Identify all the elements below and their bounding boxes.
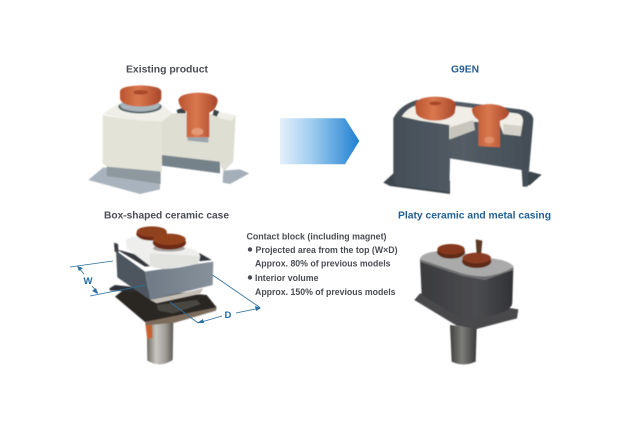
lower assembly — [109, 285, 217, 364]
dimension W — [70, 261, 146, 296]
text block: contact block specifications: Contact block (including magnet) — [246, 232, 387, 242]
back terminal — [136, 227, 167, 241]
can top silver plate — [420, 250, 514, 277]
heading: Box-shaped ceramic case: Box-shaped ceramic case — [104, 210, 229, 222]
heading: G9EN: G9EN — [451, 64, 479, 76]
orange tab — [145, 323, 153, 339]
right flange — [523, 172, 542, 186]
dark lower plate — [115, 287, 217, 322]
metal can body — [420, 259, 513, 321]
front face — [145, 262, 213, 300]
dimension W: W — [84, 276, 92, 287]
flat lead — [476, 239, 482, 256]
front terminal — [462, 255, 491, 268]
photo: platy ceramic and metal casing relay — [414, 239, 518, 364]
right block body — [162, 113, 236, 172]
tube — [450, 325, 477, 364]
text block: contact block specifications: Projected area from the top (W×D) — [256, 245, 398, 255]
left flange — [383, 173, 450, 194]
heading: Platy ceramic and metal casing: Platy ceramic and metal casing — [398, 210, 551, 222]
arrow shaft W — [78, 267, 84, 274]
heading: Existing product: Existing product — [126, 64, 208, 76]
white ceramic block — [126, 237, 200, 269]
dimension D — [170, 275, 261, 323]
collar — [153, 245, 185, 252]
right copper terminal — [178, 93, 218, 137]
text block: contact block specifications: Approx. 80% of previous models — [255, 258, 391, 268]
connector under case — [150, 288, 203, 303]
side wing — [109, 285, 147, 292]
left base plate — [88, 167, 160, 194]
back rim — [393, 100, 533, 192]
left copper terminal — [415, 97, 456, 121]
illustration: G9EN relay — [383, 97, 542, 194]
illustration: existing product relay — [88, 85, 249, 194]
front terminal — [153, 236, 186, 250]
left block front — [103, 115, 162, 172]
left wall — [116, 251, 150, 300]
upper assembly — [114, 226, 213, 303]
shaded interior block — [450, 120, 475, 139]
slot under left block — [107, 165, 161, 184]
left block top — [103, 104, 173, 122]
interior white ceramic — [402, 105, 523, 139]
text block: contact block specifications: Interior volume — [255, 273, 319, 283]
flange — [414, 293, 518, 329]
slot under right block — [162, 154, 220, 173]
text block: contact block specifications — [246, 232, 398, 297]
left copper terminal — [120, 85, 161, 107]
right base plate — [223, 169, 249, 184]
metal tube — [147, 320, 173, 364]
grey collar — [118, 100, 162, 113]
arrow: existing to G9EN — [280, 118, 359, 164]
front corner highlight — [420, 259, 513, 280]
text block: contact block specifications: Approx. 150% of previous models — [255, 287, 396, 297]
cutout shadow clips — [177, 107, 186, 113]
right block top edge — [216, 112, 236, 121]
photo: box-shaped ceramic contact block — [109, 226, 217, 364]
dimension D: D — [224, 310, 232, 321]
back terminal — [437, 245, 465, 259]
inner far wall — [117, 249, 212, 267]
right copper terminal — [472, 104, 509, 147]
back corner post — [114, 243, 119, 253]
